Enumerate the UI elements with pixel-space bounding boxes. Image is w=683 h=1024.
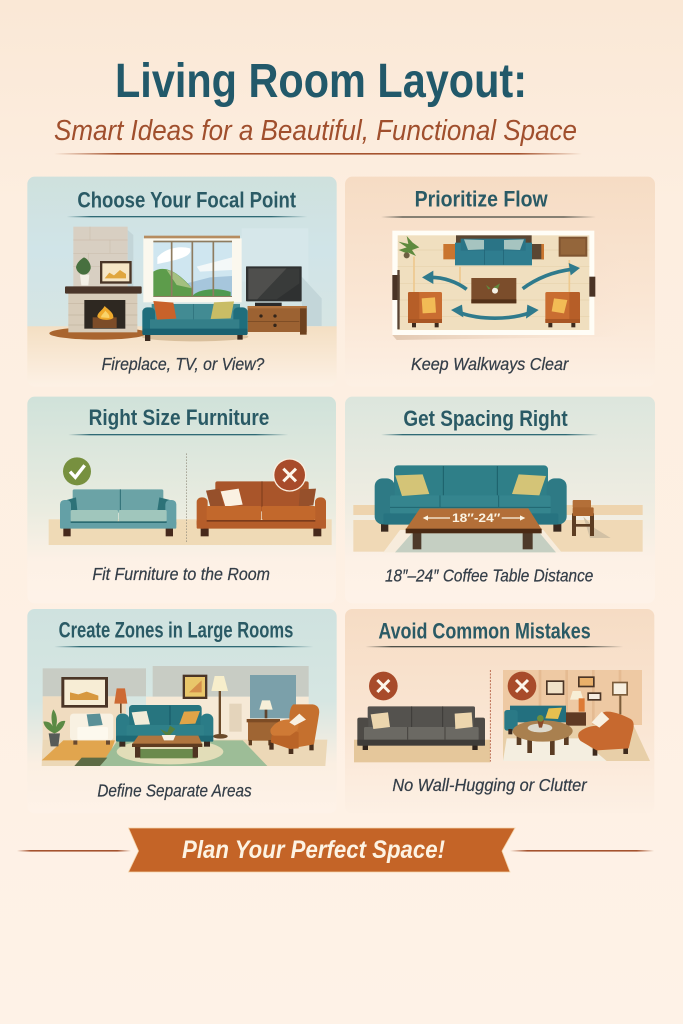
floor left bbox=[354, 740, 490, 762]
sofa top view bbox=[443, 235, 544, 265]
white armchair bbox=[70, 714, 113, 745]
icon: teal sofa bbox=[142, 301, 248, 341]
coffee table with plant bbox=[132, 726, 202, 758]
icon: television on cabinet bbox=[246, 266, 322, 335]
potted plant bbox=[43, 709, 65, 746]
icon: correct sofa bbox=[60, 489, 176, 536]
panel: right size furniture bbox=[27, 397, 336, 603]
cluttered room scene bbox=[503, 670, 650, 761]
call-to-action banner bbox=[128, 828, 515, 872]
teal sofa bbox=[116, 705, 213, 747]
floor and rug bbox=[353, 505, 643, 552]
table lamp orange bbox=[114, 688, 127, 713]
icon: cross badge bbox=[273, 458, 306, 492]
caption: spacing: 18″–24″ Coffee Table Distance bbox=[385, 566, 593, 586]
icon: potted plant bbox=[76, 257, 91, 285]
arrow: bottom walkway bbox=[451, 305, 539, 319]
panel: prioritize flow bbox=[345, 177, 655, 387]
caption: furniture: Fit Furniture to the Room bbox=[92, 564, 270, 584]
coffee table bbox=[471, 278, 516, 303]
icon: grey wall-hugging sofa bbox=[357, 706, 485, 750]
framed square art bbox=[183, 675, 207, 699]
panel: choose your focal point bbox=[27, 177, 337, 387]
panel: create zones in large rooms bbox=[27, 609, 337, 813]
icon: coffee table with distance label bbox=[406, 508, 542, 549]
panel heading: mistakes: Avoid Common Mistakes bbox=[378, 618, 591, 643]
plant top view bbox=[398, 236, 419, 258]
banner right rule bbox=[510, 850, 654, 852]
icon: teal three seat sofa bbox=[375, 465, 567, 532]
icon: fireplace with chimney bbox=[49, 227, 308, 340]
caption: focal point: Fireplace, TV, or View? bbox=[102, 354, 264, 374]
floor plan diagram bbox=[392, 231, 627, 340]
icon: cross badge right bbox=[508, 672, 536, 700]
orange armchair bbox=[269, 704, 319, 754]
side cabinet bbox=[566, 712, 586, 726]
title: Living Room Layout: bbox=[115, 55, 527, 108]
panel heading: furniture: Right Size Furniture bbox=[89, 405, 269, 430]
caption: mistakes: No Wall-Hugging or Clutter bbox=[392, 775, 588, 795]
room walls and floor bbox=[42, 666, 327, 766]
arrow: left walkway bbox=[422, 271, 467, 289]
icon: window with view bbox=[143, 236, 242, 302]
icon: oversized sofa bbox=[197, 481, 326, 536]
side table and lamp bbox=[247, 700, 280, 745]
subtitle: Smart Ideas for a Beautiful, Functional Space bbox=[54, 115, 577, 147]
panel heading: spacing: Get Spacing Right bbox=[403, 406, 568, 431]
panel heading: focal point: Choose Your Focal Point bbox=[77, 187, 297, 212]
divider bbox=[489, 670, 492, 762]
icon: framed picture bbox=[100, 261, 132, 284]
subtitle underline bbox=[54, 153, 582, 155]
teal sofa behind bbox=[504, 706, 566, 734]
banner left rule bbox=[17, 850, 131, 852]
icon: check badge bbox=[63, 457, 91, 485]
framed landscape art bbox=[61, 677, 108, 708]
panel: avoid common mistakes bbox=[345, 609, 654, 813]
icon: cross badge left bbox=[369, 672, 398, 700]
floor lamp bbox=[211, 676, 228, 739]
divider bbox=[186, 453, 188, 543]
floor strip bbox=[49, 519, 332, 545]
distance label: 18″-24″ bbox=[452, 511, 500, 525]
banner text: Plan Your Perfect Space! bbox=[182, 836, 445, 864]
wall frames bbox=[546, 676, 628, 714]
table lamp bbox=[570, 691, 585, 712]
round coffee table bbox=[513, 715, 573, 755]
caption: zones: Define Separate Areas bbox=[97, 781, 252, 801]
panel: get spacing right bbox=[345, 397, 655, 603]
side cabinet bbox=[559, 237, 587, 257]
left armchair bbox=[408, 292, 442, 327]
panel heading: zones: Create Zones in Large Rooms bbox=[59, 618, 293, 643]
orange armchair bbox=[578, 712, 634, 756]
caption: flow: Keep Walkways Clear bbox=[411, 354, 569, 374]
right armchair bbox=[545, 292, 580, 327]
icon: side stool bbox=[572, 500, 611, 538]
arrow: right walkway bbox=[523, 263, 580, 289]
panel heading: flow: Prioritize Flow bbox=[415, 187, 548, 212]
